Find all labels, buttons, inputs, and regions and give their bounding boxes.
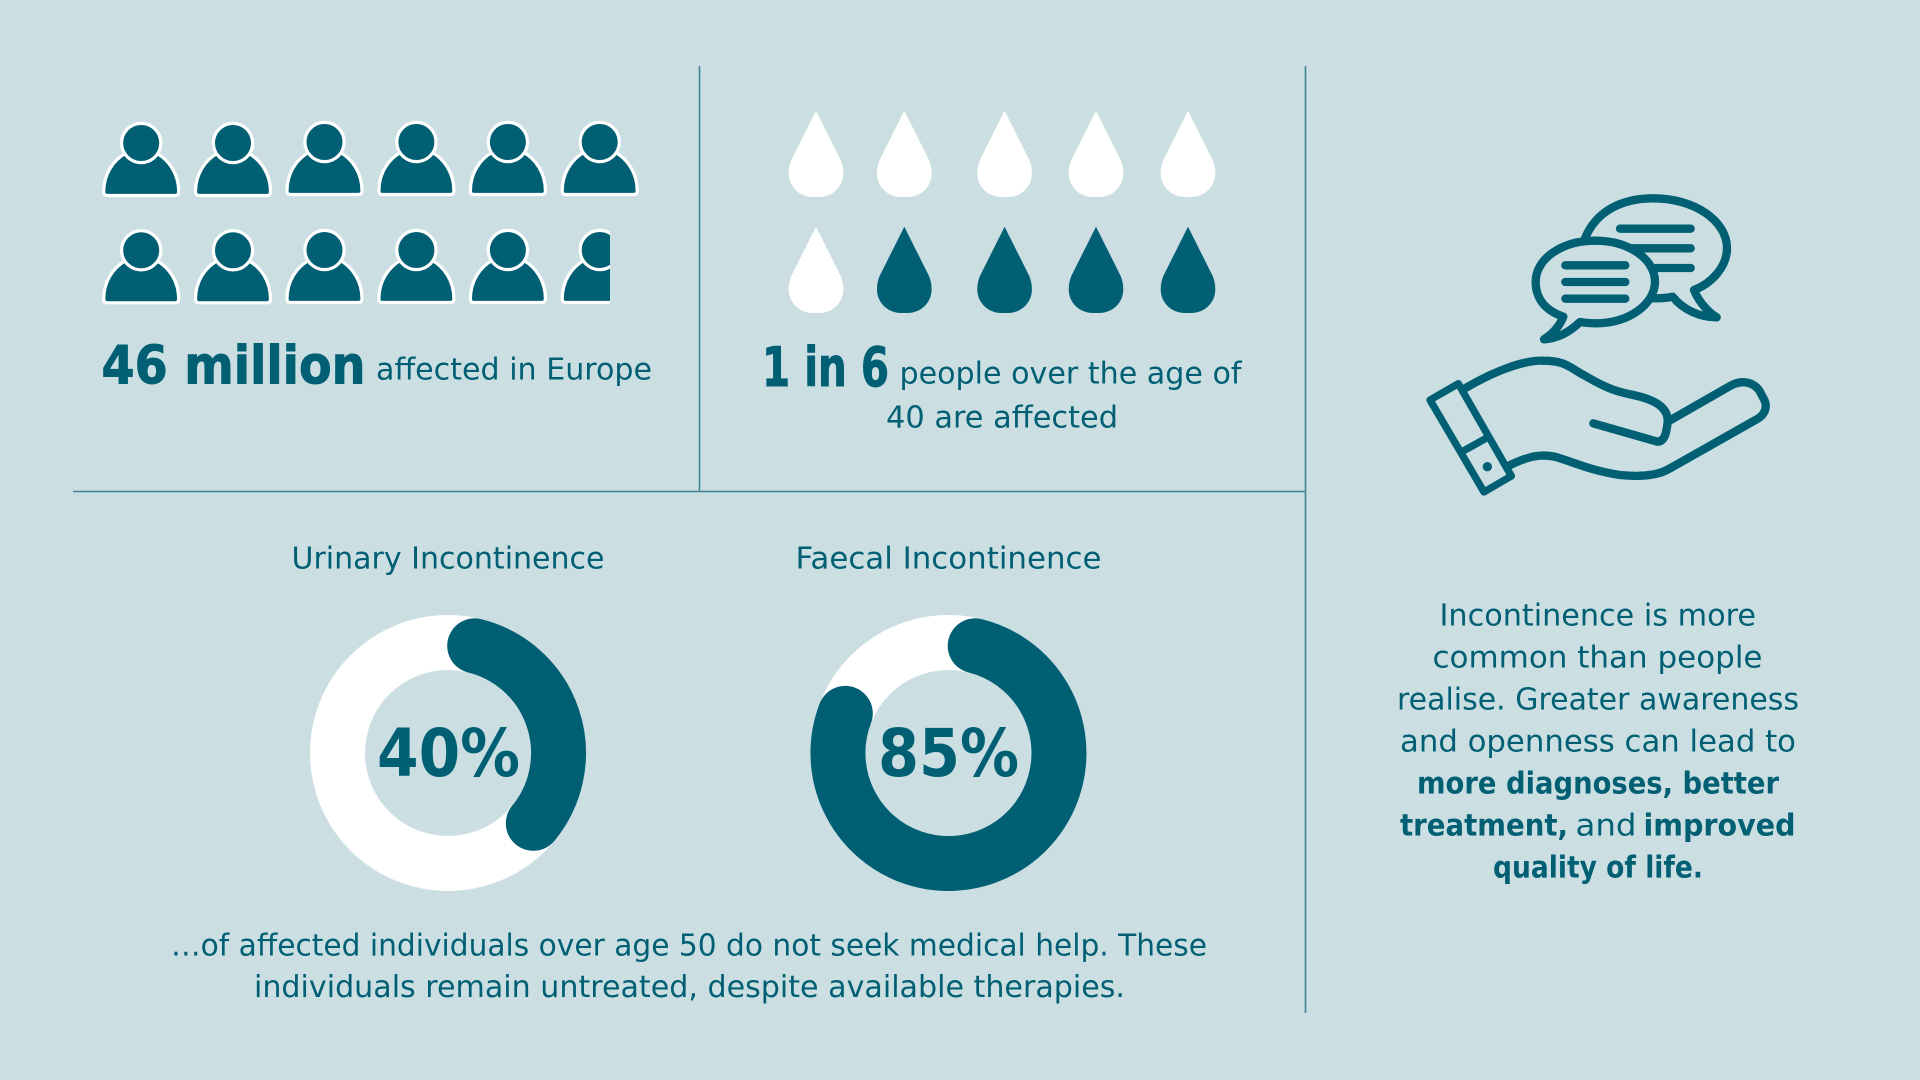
icon: hand — [1465, 361, 1766, 476]
stat: 46 million affected in Europe — [102, 335, 652, 396]
text block: donut chart caption: …of affected individuals over age 50 do not seek medical help. These — [171, 928, 1207, 964]
stat: 46 million affected in Europe: 46 million — [102, 335, 366, 396]
icon row: drops, second row — [789, 227, 1215, 313]
icon: front speech bubble — [1536, 241, 1655, 339]
text block: awareness message: and openness can lead to — [1400, 724, 1796, 759]
heading: Faecal Incontinence: Faecal Incontinence — [796, 542, 1102, 576]
stat: 1 in 6 people over the age of 40 are affected: 40 are affected — [886, 400, 1118, 435]
donut chart: faecal 85% — [838, 642, 1059, 864]
heading: Urinary Incontinence: Urinary Incontinence — [292, 542, 604, 576]
text block: awareness message: treatment, — [1400, 808, 1568, 843]
text block: awareness message: common than people — [1432, 640, 1762, 675]
donut chart: urinary 40%: 40% — [377, 715, 520, 792]
text block: awareness message: more diagnoses, better — [1417, 766, 1779, 801]
panel: people pictogram 46 million — [102, 122, 652, 396]
icon row: people, first row — [104, 122, 637, 196]
text block: awareness message: quality of life. — [1493, 850, 1703, 885]
icon: open hand with speech bubbles — [1430, 198, 1766, 492]
stat: 1 in 6 people over the age of 40 are affected — [762, 336, 1243, 435]
text block: donut chart caption — [171, 928, 1207, 1005]
text block: awareness message: improved — [1644, 808, 1796, 843]
icon row: people, second row with partial figure — [104, 230, 637, 303]
text block: donut chart caption: individuals remain untreated, despite available therapies. — [254, 970, 1125, 1005]
text block: awareness message: and — [1576, 808, 1636, 843]
panel: water drops 1 in 6 — [762, 111, 1243, 435]
text block: awareness message: realise. Greater awareness — [1397, 682, 1799, 717]
stat: 1 in 6 people over the age of 40 are affected: people over the age of — [900, 356, 1243, 391]
donut chart: faecal 85%: 85% — [878, 715, 1019, 792]
stat: 46 million affected in Europe: affected in Europe — [376, 352, 652, 387]
stat: 1 in 6 people over the age of 40 are affected: 1 in 6 — [762, 336, 889, 399]
text block: awareness message — [1397, 599, 1799, 885]
donut chart: urinary 40% — [338, 642, 559, 864]
icon: back speech bubble — [1585, 198, 1727, 317]
text block: awareness message: Incontinence is more — [1440, 599, 1756, 634]
icon: shirt cuff — [1430, 384, 1511, 492]
icon row: drops, first row — [789, 111, 1215, 197]
